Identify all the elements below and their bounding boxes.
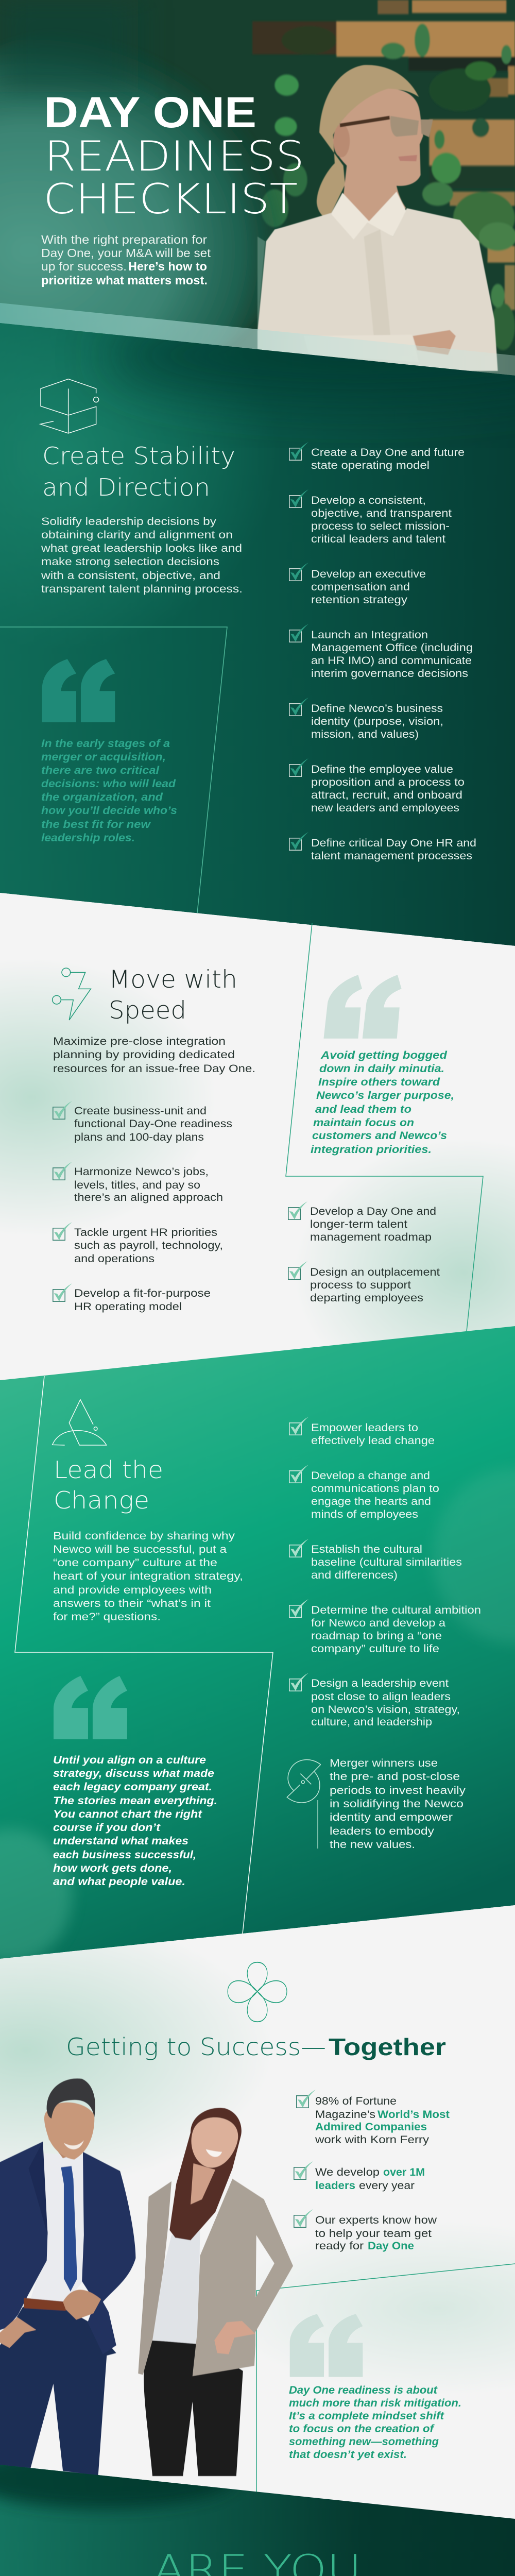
teal left wash <box>0 48 278 345</box>
photo: laughing woman <box>138 2108 293 2476</box>
photo: smiling man <box>0 2078 135 2476</box>
hero title: DAY ONE <box>44 88 256 137</box>
section 1 checklist: Launch an Integration <box>311 629 428 641</box>
quote text: to focus on the creation of <box>289 2423 435 2435</box>
quote text: there are two critical <box>41 765 160 776</box>
quote text: Until you align on a culture <box>53 1754 206 1766</box>
quote text: Inspire others toward <box>318 1076 440 1088</box>
quote text: and lead them to <box>315 1104 411 1115</box>
quote text: each legacy company great. <box>53 1781 212 1793</box>
section 4 proof points: World’s Most <box>377 2109 450 2121</box>
quote text: the organization, and <box>41 791 163 803</box>
section 2 paragraph: Maximize pre-close integration <box>53 1036 226 1047</box>
section 1 checklist: Create a Day One and future <box>311 447 465 459</box>
section 4 proof points: every year <box>359 2180 415 2192</box>
section 2 checklist left: HR operating model <box>74 1301 182 1313</box>
section 3 paragraph: heart of your integration strategy, <box>53 1570 243 1582</box>
blouse <box>258 193 498 371</box>
section 4 heading: Together <box>329 2033 446 2060</box>
section 3 frame <box>15 1376 273 1934</box>
section 1 paragraph: make strong selection decisions <box>41 556 219 568</box>
hair <box>317 65 419 216</box>
section 3 checklist: engage the hearts and <box>311 1496 431 1507</box>
section 1 heading: Create Stability <box>42 442 235 470</box>
section 1 checklist: an HR IMO) and communicate <box>311 655 472 667</box>
quote text: the best fit for new <box>41 819 151 831</box>
quote text: and what people value. <box>53 1876 185 1888</box>
quote text <box>289 2384 461 2461</box>
section 3 heading <box>54 1456 163 1514</box>
quote text: Day One readiness is about <box>289 2384 438 2396</box>
section 1 paragraph: transparent talent planning process. <box>41 583 243 595</box>
section 1 heading <box>42 442 235 501</box>
section 2 paragraph: planning by providing dedicated <box>53 1049 235 1061</box>
quote text: down in daily minutia. <box>319 1063 444 1075</box>
section 4 proof points: work with Korn Ferry <box>315 2134 430 2146</box>
section 4 background <box>0 1905 515 2370</box>
panel: section 2 quote <box>286 923 483 1331</box>
section 3 checklist: minds of employees <box>311 1509 418 1520</box>
quote text: Newco’s larger purpose, <box>316 1090 454 1101</box>
section 2 checklist left: plans and 100-day plans <box>74 1131 204 1143</box>
section 4 proof points: Admired Companies <box>315 2121 427 2133</box>
hero title: READINESS <box>44 132 304 180</box>
section 3 checklist: post close to align leaders <box>311 1691 451 1703</box>
quote text: customers and Newco’s <box>312 1130 447 1142</box>
quote text: how you’ll decide who’s <box>41 805 177 817</box>
section 5 background <box>0 2465 515 2576</box>
section 4 heading <box>66 2033 446 2061</box>
hero intro paragraph: Day One, your M&A will be set <box>41 246 211 260</box>
quote text: You cannot chart the right <box>53 1808 202 1820</box>
icon: stability cube <box>40 379 99 433</box>
icon: quote mark <box>290 2314 363 2377</box>
section 3 checklist: for Newco and develop a <box>311 1617 445 1629</box>
section 3 checklist: company” culture to life <box>311 1643 439 1655</box>
hero title <box>43 88 304 223</box>
section 2 checklist left: and operations <box>74 1253 154 1265</box>
section 2 checklist right: management roadmap <box>310 1231 432 1243</box>
section 2 checklist right: longer-term talent <box>310 1218 407 1230</box>
section 2 background <box>0 893 515 1344</box>
hero intro paragraph <box>41 233 211 287</box>
section 3 heading: Lead the <box>54 1456 163 1484</box>
section 3 checklist: Develop a change and <box>311 1470 430 1482</box>
hero intro paragraph: With the right preparation for <box>41 233 207 246</box>
section 2 checklist right: departing employees <box>310 1292 423 1304</box>
section 1 checklist: compensation and <box>311 581 410 593</box>
merger callout: in solidifying the Newco <box>330 1798 464 1810</box>
hero photo background <box>0 0 515 386</box>
quote text: integration priorities. <box>311 1144 432 1156</box>
section 4 heading: Getting to Success— <box>66 2033 326 2061</box>
section 1 paragraph: Solidify leadership decisions by <box>41 516 217 528</box>
section 1 paragraph: with a consistent, objective, and <box>41 570 220 582</box>
quote text: It’s a complete mindset shift <box>289 2410 444 2422</box>
section 2 paragraph <box>53 1036 255 1075</box>
quote text: decisions: who will lead <box>41 778 176 790</box>
section 3 background <box>0 1324 515 1963</box>
section 1 checklist: Define critical Day One HR and <box>311 837 476 849</box>
section 2 checklist right <box>288 1201 440 1304</box>
section 1 checklist: Define Newco’s business <box>311 703 443 715</box>
section 2 checklist right: Design an outplacement <box>310 1266 440 1278</box>
face and neck <box>333 89 423 223</box>
section 3 checklist: Determine the cultural ambition <box>311 1604 481 1616</box>
section 2 checklist left: Develop a fit-for-purpose <box>74 1287 211 1299</box>
panel: section 4 quote <box>289 2314 461 2461</box>
merger callout: leaders to embody <box>330 1825 435 1837</box>
section 3 paragraph: and provide employees with <box>53 1584 212 1596</box>
quote text: maintain focus on <box>313 1117 414 1129</box>
icon: lightning <box>53 968 91 1020</box>
section 1 checklist: mission, and values) <box>311 728 419 740</box>
section 1 checklist: identity (purpose, vision, <box>311 716 443 727</box>
quote text: In the early stages of a <box>41 738 170 750</box>
section 4 proof points <box>294 2090 450 2252</box>
section 2 paragraph: resources for an issue-free Day One. <box>53 1063 255 1075</box>
section 4 proof points: Day One <box>368 2240 414 2252</box>
quote text: understand what makes <box>53 1835 188 1847</box>
section 2 heading: Move with <box>109 965 237 994</box>
quote text: how work gets done, <box>53 1862 172 1874</box>
hero translucent band <box>0 303 515 376</box>
section 1 checklist <box>289 442 476 862</box>
panel: section 1 quote <box>0 627 227 913</box>
section 1 paragraph: what great leadership looks like and <box>41 543 242 554</box>
section 4 proof points: 98% of Fortune <box>315 2095 397 2107</box>
quote text <box>53 1754 217 1888</box>
icon: clover <box>228 1962 287 2022</box>
section 1 checklist: Develop an executive <box>311 568 426 580</box>
quote text: merger or acquisition, <box>41 751 166 763</box>
section 3 checklist: communications plan to <box>311 1483 439 1495</box>
quote text: The stories mean everything. <box>53 1795 217 1807</box>
section 3 paragraph: Newco will be successful, put a <box>53 1544 227 1555</box>
panel: section 3 quote <box>53 1676 217 1888</box>
section 3 paragraph: “one company” culture at the <box>53 1557 217 1569</box>
section 1 checklist: Management Office (including <box>311 642 473 654</box>
icon: quote mark <box>54 1676 127 1739</box>
icon: merger symbol <box>287 1760 321 1803</box>
section 1 checklist: Define the employee value <box>311 764 453 775</box>
section 3 paragraph <box>53 1530 243 1623</box>
section 2 checklist right: process to support <box>310 1279 411 1291</box>
section 2 checklist left <box>53 1101 232 1313</box>
quote text: Avoid getting bogged <box>320 1049 448 1061</box>
section 2 checklist left: functional Day-One readiness <box>74 1118 232 1130</box>
hero intro paragraph: up for success. <box>41 260 127 273</box>
quote text: course if you don’t <box>53 1822 161 1834</box>
section 3 checklist: on Newco’s vision, strategy, <box>311 1704 460 1716</box>
section 4 proof points: to help your team get <box>315 2228 432 2240</box>
section 3 checklist: roadmap to bring a “one <box>311 1630 442 1642</box>
section 2 checklist right: Develop a Day One and <box>310 1206 436 1217</box>
section 3 checklist: and differences) <box>311 1569 398 1581</box>
section 1 paragraph: obtaining clarity and alignment on <box>41 529 233 541</box>
quote text: strategy, discuss what made <box>53 1768 214 1780</box>
section 2 checklist left: Tackle urgent HR priorities <box>74 1227 217 1239</box>
hero intro paragraph: prioritize what matters most. <box>41 274 208 287</box>
section 1 heading: and Direction <box>42 473 210 501</box>
merger callout <box>318 1757 466 1851</box>
merger callout: periods to invest heavily <box>330 1785 466 1797</box>
section 4 proof points: leaders <box>315 2180 355 2192</box>
quote text: leadership roles. <box>41 832 135 844</box>
section 3 checklist: Establish the cultural <box>311 1544 422 1555</box>
section 4 proof points: Magazine’s <box>315 2109 375 2121</box>
icon: quote mark <box>42 659 115 722</box>
quote text: each business successful, <box>53 1849 196 1861</box>
section 1 checklist: new leaders and employees <box>311 802 459 814</box>
section 1 checklist: proposition and a process to <box>311 776 465 788</box>
section 1 checklist: talent management processes <box>311 850 472 862</box>
section 2 heading: Speed <box>109 996 186 1025</box>
section 1 checklist: critical leaders and talent <box>311 533 445 545</box>
icon: triangle and arc <box>53 1400 107 1445</box>
section 3 paragraph: Build confidence by sharing why <box>53 1530 235 1542</box>
merger callout: the pre- and post-close <box>330 1771 460 1783</box>
section 3 paragraph: for me?” questions. <box>53 1611 161 1623</box>
section 3 checklist: culture, and leadership <box>311 1716 432 1728</box>
quote text <box>311 1049 454 1156</box>
section 2 checklist left: Create business-unit and <box>74 1105 207 1117</box>
section 1 checklist: Develop a consistent, <box>311 495 426 506</box>
section 2 checklist left: such as payroll, technology, <box>74 1240 223 1251</box>
section 3 checklist: Design a leadership event <box>311 1677 449 1689</box>
section 2 checklist left: Harmonize Newco’s jobs, <box>74 1166 209 1178</box>
section 1 background <box>0 258 515 948</box>
section 3 checklist: Empower leaders to <box>311 1422 418 1434</box>
section 1 checklist: attract, recruit, and onboard <box>311 789 462 801</box>
section 1 checklist: state operating model <box>311 460 430 471</box>
section 3 checklist: effectively lead change <box>311 1435 435 1447</box>
hero intro paragraph: Here’s how to <box>128 260 207 273</box>
quote text: much more than risk mitigation. <box>289 2397 461 2409</box>
merger callout: Merger winners use <box>330 1757 438 1769</box>
section 2 checklist left: levels, titles, and pay so <box>74 1179 200 1191</box>
quote text: that doesn’t yet exist. <box>289 2449 407 2461</box>
section 4 frame lines <box>256 2264 515 2492</box>
section 4 proof points: Our experts know how <box>315 2214 437 2226</box>
section 2 checklist left: there’s an aligned approach <box>74 1192 223 1204</box>
merger callout: identity and empower <box>330 1811 453 1823</box>
section 1 checklist: process to select mission- <box>311 520 450 532</box>
section 3 checklist <box>289 1417 481 1728</box>
section 1 paragraph <box>41 516 243 595</box>
section 3 heading: Change <box>54 1486 149 1514</box>
section 4 proof points: ready for <box>315 2240 364 2252</box>
section 1 checklist: objective, and transparent <box>311 507 452 519</box>
section 4 proof points: We develop <box>315 2166 380 2178</box>
section 1 checklist: interim governance decisions <box>311 668 468 680</box>
quote text: something new—something <box>289 2436 439 2448</box>
hero title: CHECKLIST <box>43 175 298 223</box>
quote text <box>41 738 177 844</box>
section 1 checklist: retention strategy <box>311 594 408 606</box>
section 3 checklist: baseline (cultural similarities <box>311 1556 462 1568</box>
merger callout: the new values. <box>330 1839 415 1851</box>
section 3 paragraph: answers to their “what’s in it <box>53 1598 211 1609</box>
section 2 heading <box>109 965 237 1025</box>
icon: quote mark <box>323 975 402 1039</box>
section 4 proof points: over 1M <box>383 2166 425 2178</box>
